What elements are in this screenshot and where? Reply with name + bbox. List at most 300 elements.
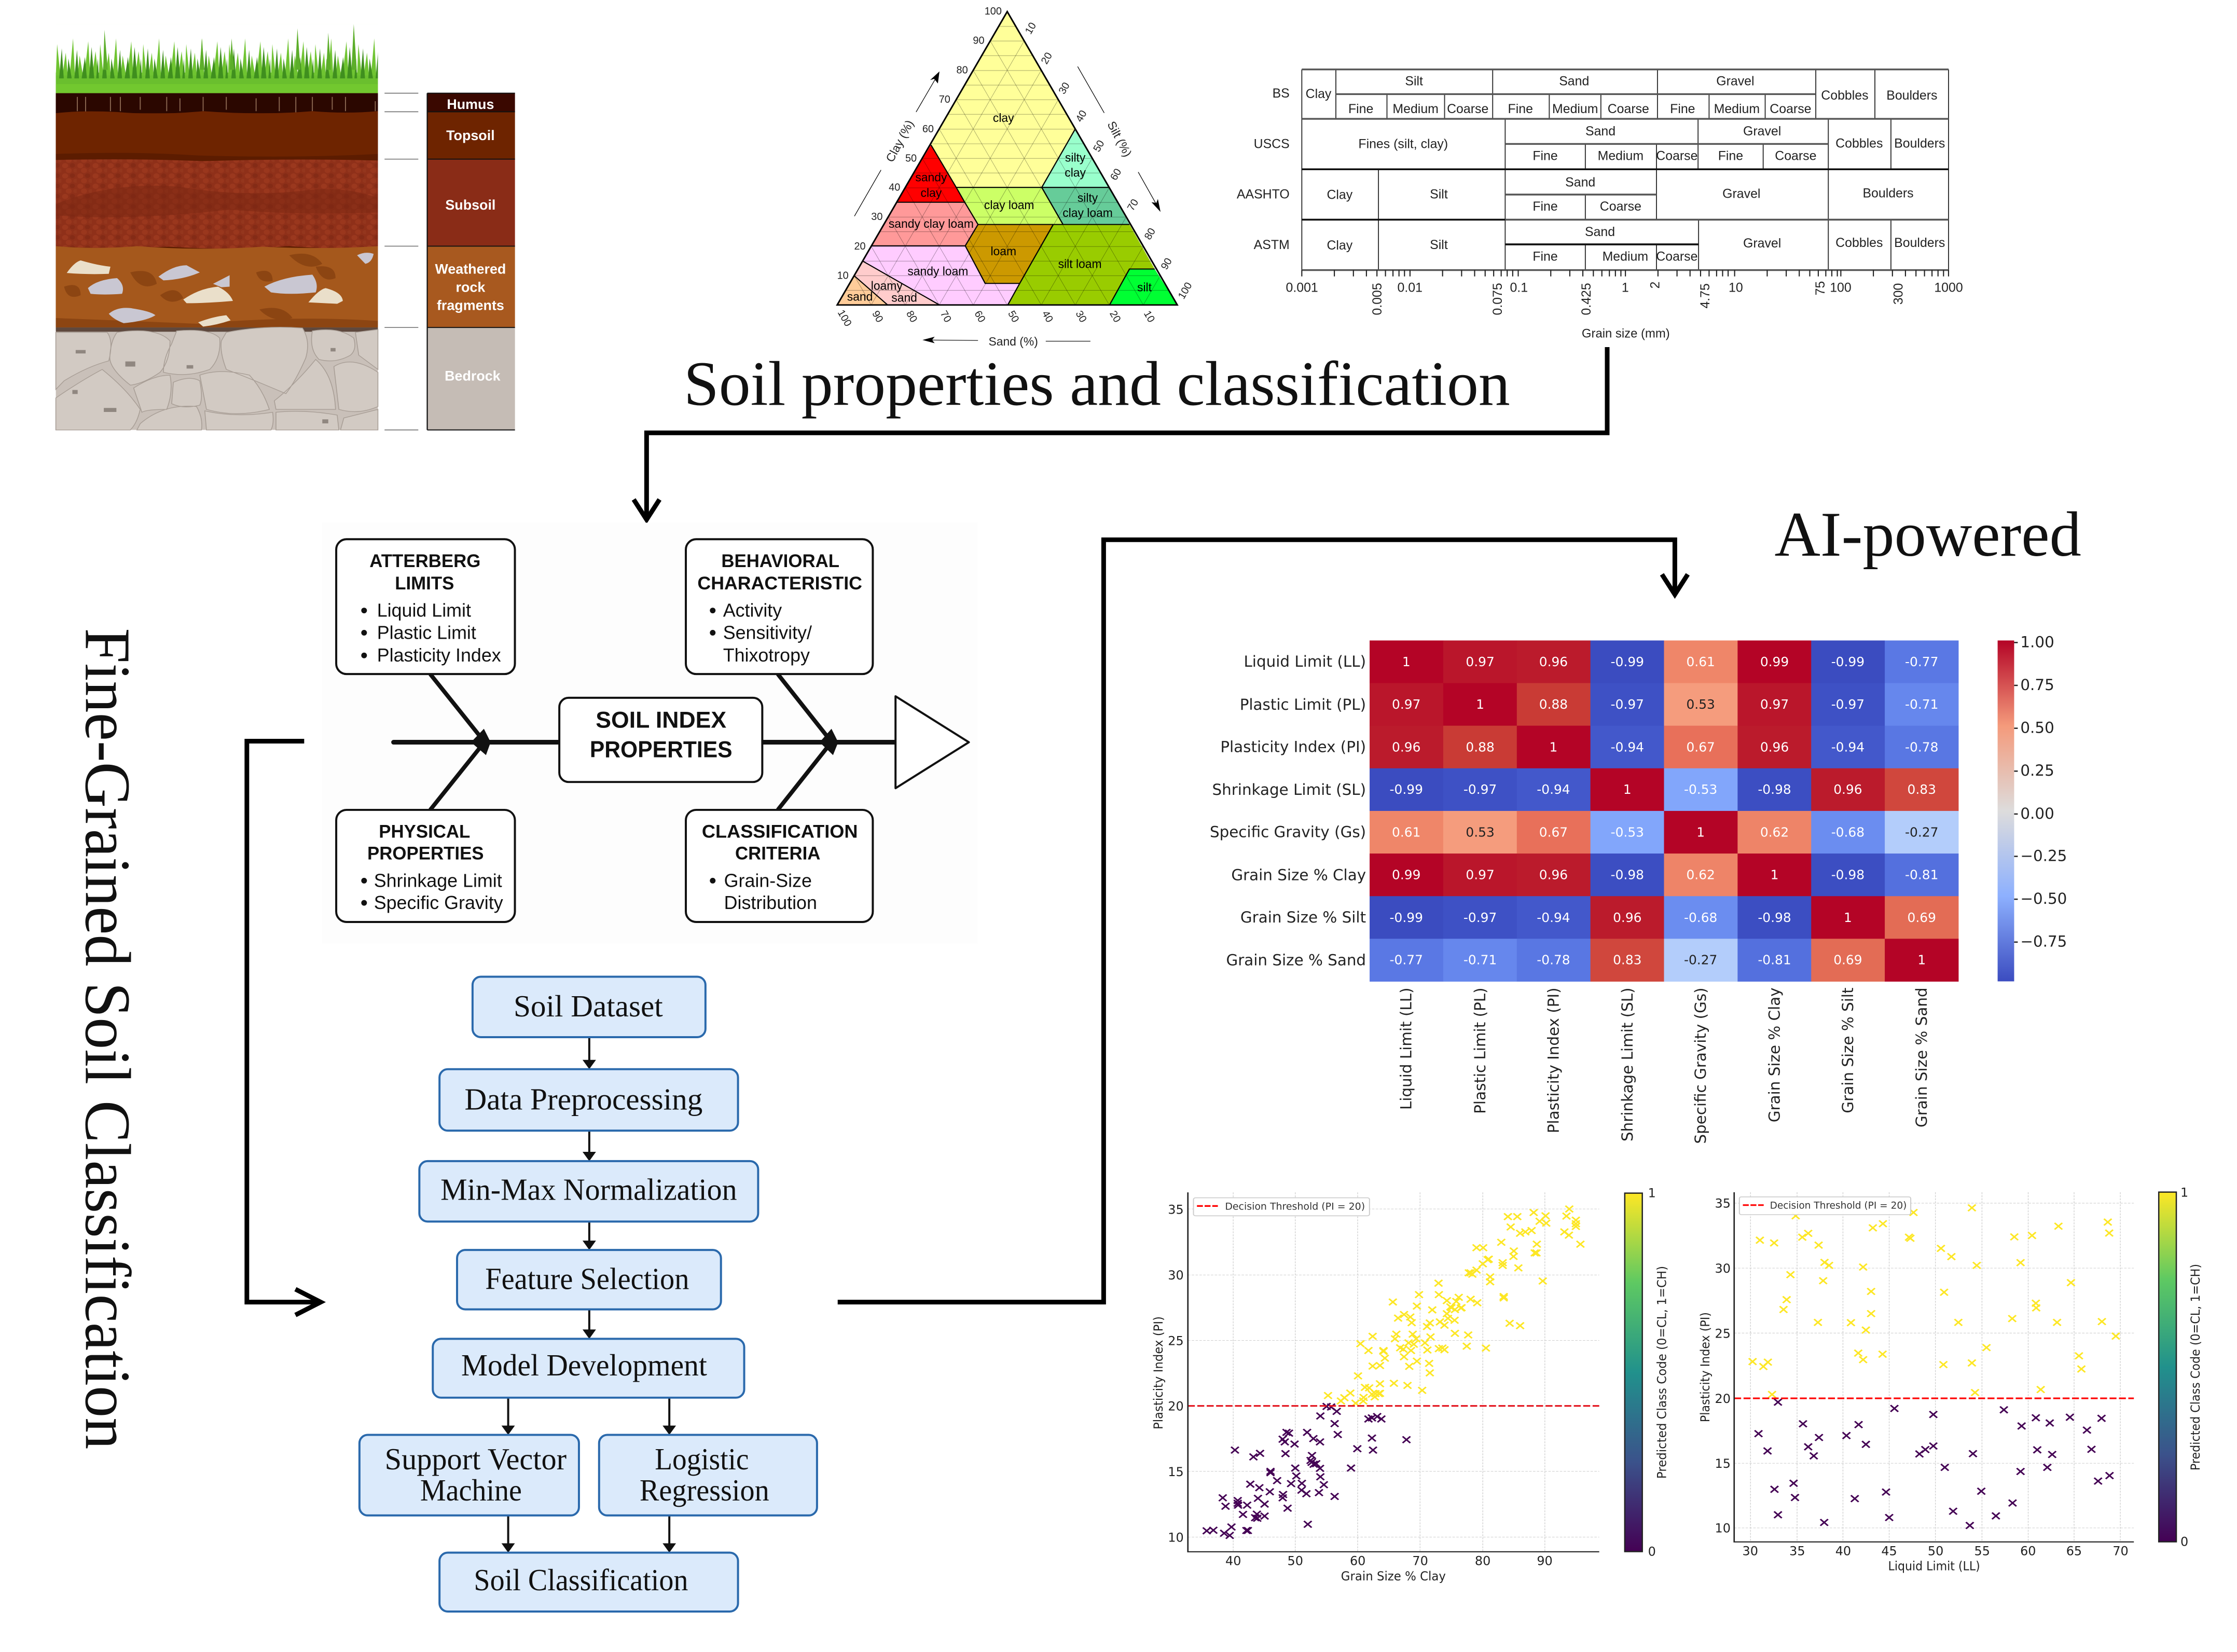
texture class labels: clay loam — [984, 198, 1034, 212]
triangle axis arrows — [854, 66, 1159, 341]
layer legend column — [427, 93, 515, 430]
scatter 1 x ticks — [1225, 1553, 1553, 1568]
texture class labels: sandy loam — [907, 265, 968, 278]
heatmap values: 0.96 — [1613, 910, 1642, 925]
heatmap row labels: Grain Size % Clay — [1231, 866, 1366, 884]
BS row — [1306, 74, 1937, 116]
scatter 2 x label: Liquid Limit (LL) — [1888, 1559, 1980, 1573]
scatter 1 x ticks: 60 — [1350, 1553, 1365, 1568]
heatmap row labels: Plasticity Index (PI) — [1220, 738, 1366, 755]
texture class labels: sand — [847, 290, 873, 303]
arrow: soil properties to index properties — [633, 347, 1607, 519]
heatmap values: -0.27 — [1905, 825, 1938, 840]
scatter 2 colorbar: 0 — [2180, 1535, 2188, 1549]
heatmap values: -0.68 — [1831, 825, 1865, 840]
scatter 2 colorbar label: Predicted Class Code (0=CL, 1=CH) — [2188, 1264, 2203, 1470]
layer boundary ticks — [384, 93, 418, 430]
ASTM row: Gravel — [1743, 236, 1781, 251]
USCS row: Cobbles — [1835, 136, 1883, 151]
step: soil classification — [439, 1552, 738, 1612]
heatmap values: -0.98 — [1611, 867, 1644, 882]
ASTM row: Silt — [1430, 238, 1448, 252]
scatter 2 threshold line — [1734, 1397, 2134, 1400]
head triangle — [895, 696, 969, 788]
heatmap values: -0.77 — [1905, 654, 1938, 669]
heatmap values: -0.53 — [1684, 782, 1717, 797]
heatmap colorbar: 0.25 — [2020, 762, 2054, 779]
heatmap row labels: Specific Gravity (Gs) — [1210, 823, 1366, 841]
step: soil classification: Soil Classification — [474, 1563, 688, 1597]
scatter 2 legend box — [1739, 1197, 1911, 1215]
step: logistic regression: Logistic — [655, 1442, 749, 1476]
AASHTO row: Silt — [1430, 187, 1448, 201]
heatmap values: -0.71 — [1905, 697, 1938, 712]
heatmap values: 0.96 — [1539, 654, 1568, 669]
legend column labels: fragments — [437, 297, 504, 313]
sand axis numbers: 10 — [1141, 309, 1157, 324]
heatmap values: -0.78 — [1537, 953, 1570, 968]
box: behavioral characteristic: CHARACTERISTIC — [697, 573, 862, 594]
texture class labels: sandy — [915, 170, 947, 184]
box: physical properties: PHYSICAL — [379, 822, 470, 842]
heatmap column labels: Plasticity Index (PI) — [1544, 987, 1562, 1133]
grain size axis numbers: 300 — [1891, 283, 1905, 305]
heatmap values: 0.96 — [1392, 739, 1420, 754]
scatter 2 legend text: Decision Threshold (PI = 20) — [1770, 1200, 1907, 1211]
clay axis numbers: 50 — [905, 153, 917, 164]
correlation heatmap — [1210, 633, 2067, 1144]
box: behavioral characteristic — [686, 539, 873, 674]
clay axis numbers: 70 — [939, 94, 950, 105]
scatter 2 x ticks: 60 — [2020, 1544, 2036, 1558]
AASHTO row: Fine — [1532, 199, 1558, 214]
scatter 2 y ticks: 30 — [1715, 1261, 1731, 1276]
heatmap values: 0.61 — [1392, 825, 1420, 840]
grain size axis title: Grain size (mm) — [1582, 327, 1670, 341]
heatmap values: 1 — [1476, 697, 1484, 712]
silt axis numbers: 40 — [1074, 108, 1089, 124]
grass layer — [56, 24, 378, 93]
box: behavioral characteristic: Activity — [723, 600, 782, 621]
heatmap values: -0.94 — [1537, 910, 1570, 925]
heatmap values: 0.67 — [1686, 739, 1715, 754]
heatmap values: 0.96 — [1539, 867, 1568, 882]
workflow flowchart — [360, 976, 817, 1612]
scatter 1 x ticks: 70 — [1412, 1553, 1428, 1568]
subsoil dark band — [56, 186, 378, 217]
scatter 2 colorbar: 1 — [2180, 1186, 2188, 1200]
fishbone diagram — [322, 522, 977, 944]
BS row: Coarse — [1608, 102, 1649, 116]
grain size axis numbers: 75 — [1813, 281, 1828, 295]
legend column labels: rock — [456, 279, 485, 295]
heatmap values: 0.69 — [1908, 910, 1936, 925]
box: physical properties: Shrinkage Limit — [374, 870, 502, 891]
texture class labels: silty — [1065, 151, 1086, 164]
heatmap values: 0.53 — [1686, 697, 1715, 712]
USCS row: Coarse — [1656, 149, 1697, 163]
scatter 1 CH points — [1328, 1209, 1580, 1403]
heatmap values: 0.67 — [1539, 825, 1568, 840]
BS row: Medium — [1392, 102, 1439, 116]
step: data preprocessing: Data Preprocessing — [464, 1082, 702, 1116]
scatter 1 y ticks: 15 — [1168, 1465, 1184, 1479]
heatmap values: -0.99 — [1390, 782, 1423, 797]
scatter 2 x ticks: 55 — [1974, 1544, 1990, 1558]
AASHTO row: Clay — [1327, 187, 1353, 202]
box: classification criteria: CRITERIA — [735, 844, 820, 864]
texture class labels: loam — [990, 244, 1016, 258]
scatter 1 y ticks: 35 — [1168, 1202, 1184, 1217]
heatmap colorbar: 0.00 — [2020, 805, 2054, 822]
ASTM row: Boulders — [1894, 236, 1945, 250]
heatmap column labels: Grain Size % Clay — [1765, 987, 1783, 1122]
heading: soil properties and classification: Soil properties and classification — [684, 349, 1510, 419]
heatmap values: 0.62 — [1760, 825, 1789, 840]
bedrock layer — [56, 327, 378, 430]
subsoil layer — [56, 159, 378, 249]
legend column labels — [435, 97, 506, 384]
AASHTO row: Coarse — [1600, 199, 1641, 214]
legend column labels: Humus — [447, 97, 494, 112]
texture class labels: clay — [993, 111, 1014, 125]
heatmap values: 0.69 — [1833, 953, 1862, 968]
arrow: workflow to AI results — [838, 540, 1688, 1302]
step: model development: Model Development — [461, 1348, 707, 1382]
grain size axis numbers: 4.75 — [1698, 283, 1713, 309]
silt axis numbers: 30 — [1057, 80, 1072, 96]
scatter 1 colorbar — [1625, 1186, 1656, 1559]
texture class labels: clay — [921, 186, 942, 199]
sand axis numbers: 90 — [869, 309, 885, 324]
texture class labels: silt loam — [1058, 257, 1102, 271]
heatmap values: -0.94 — [1611, 739, 1644, 754]
standard names: ASTM — [1254, 238, 1290, 252]
heatmap column labels: Grain Size % Sand — [1913, 987, 1930, 1127]
heatmap values: 1 — [1623, 782, 1632, 797]
silt axis numbers: 90 — [1159, 256, 1175, 272]
vertical heading: fine-grained soil classification: Fine-Grained Soil Classification — [71, 628, 143, 1449]
AASHTO row — [1327, 175, 1914, 214]
heatmap column labels: Shrinkage Limit (SL) — [1619, 987, 1636, 1141]
grain size axis numbers: 0.01 — [1397, 280, 1423, 295]
scatter 1 x ticks: 90 — [1537, 1553, 1553, 1568]
heatmap colorbar: −0.75 — [2020, 933, 2067, 951]
sand axis numbers: 60 — [972, 309, 988, 324]
BS row: Medium — [1714, 102, 1760, 116]
USCS row: Medium — [1598, 149, 1644, 163]
heatmap values: -0.53 — [1611, 825, 1644, 840]
AASHTO row: Gravel — [1722, 186, 1760, 201]
sand axis numbers: 50 — [1005, 309, 1021, 324]
soil base tone — [56, 93, 378, 327]
box: atterberg limits: ATTERBERG — [369, 551, 480, 571]
BS row: Gravel — [1716, 74, 1755, 88]
USCS row: Fine — [1718, 149, 1743, 163]
texture class labels — [847, 111, 1152, 304]
heatmap values: 0.96 — [1833, 782, 1862, 797]
heatmap colorbar: 1.00 — [2020, 633, 2054, 651]
scatter 2 x ticks: 70 — [2112, 1544, 2129, 1558]
box: atterberg limits: Liquid Limit — [377, 600, 471, 621]
box: behavioral characteristic: BEHAVIORAL — [721, 551, 839, 571]
texture regions — [837, 11, 1177, 305]
scatter 2 CL points — [1759, 1402, 2109, 1525]
heatmap column labels — [1398, 987, 1930, 1144]
heatmap colorbar: 0.75 — [2020, 676, 2054, 694]
topsoil layer — [56, 111, 378, 160]
clay axis numbers: 60 — [922, 123, 934, 135]
step: min-max normalization: Min-Max Normalization — [440, 1173, 737, 1207]
box: physical properties: PROPERTIES — [367, 844, 484, 864]
grain size axis numbers: 100 — [1830, 280, 1852, 295]
grain size axis numbers: 0.425 — [1579, 283, 1594, 315]
flow arrows — [502, 1037, 676, 1552]
legend column labels: Topsoil — [446, 128, 495, 143]
grain size axis numbers: 0.005 — [1370, 283, 1385, 315]
scatter 2 x ticks: 45 — [1881, 1544, 1897, 1558]
ASTM row: Clay — [1327, 238, 1353, 253]
heatmap values: -0.94 — [1537, 782, 1570, 797]
heatmap values: -0.71 — [1463, 953, 1497, 968]
legend column labels: Subsoil — [445, 197, 495, 213]
texture class labels: sandy clay loam — [889, 217, 974, 230]
BS row: Clay — [1306, 87, 1332, 101]
grain size axis numbers: 0.1 — [1510, 280, 1528, 295]
silt axis numbers: 50 — [1091, 139, 1107, 154]
heatmap values: 0.88 — [1539, 697, 1568, 712]
grain size axis numbers: 1000 — [1934, 280, 1963, 295]
step: feature selection — [457, 1250, 721, 1310]
scatter 2 y ticks: 25 — [1715, 1326, 1731, 1341]
legend column labels: Bedrock — [445, 368, 501, 384]
scatter 2 x ticks: 30 — [1743, 1544, 1758, 1558]
scatter 1 colorbar label: Predicted Class Code (0=CL, 1=CH) — [1654, 1266, 1669, 1479]
scatter 2 y label: Plasticity Index (PI) — [1698, 1312, 1713, 1422]
clay axis numbers: 20 — [854, 241, 866, 252]
heatmap values: 1 — [1402, 654, 1411, 669]
scatter 2 grid — [1734, 1192, 2134, 1542]
grain size classification table — [1237, 70, 1963, 341]
box: physical properties: Specific Gravity — [374, 892, 503, 913]
box: soil index properties — [559, 698, 762, 782]
BS row: Coarse — [1447, 102, 1488, 116]
clay axis numbers — [837, 6, 1002, 282]
clay axis numbers: 40 — [889, 182, 900, 193]
step: feature selection: Feature Selection — [485, 1262, 689, 1296]
USCS row: Boulders — [1894, 136, 1945, 151]
heatmap values: 0.99 — [1392, 867, 1420, 882]
heatmap values: -0.97 — [1831, 697, 1865, 712]
USCS row: Fine — [1532, 149, 1558, 163]
sand axis numbers: 20 — [1107, 309, 1123, 324]
heatmap colorbar: −0.25 — [2020, 847, 2067, 864]
heatmap values: 1 — [1917, 953, 1926, 968]
scatter 1 y label: Plasticity Index (PI) — [1151, 1316, 1166, 1429]
box: atterberg limits: Plasticity Index — [377, 645, 501, 666]
silt axis numbers: 60 — [1108, 167, 1124, 183]
scatter chart: clay vs plasticity index — [1151, 1186, 1669, 1584]
BS row: Fine — [1670, 102, 1695, 116]
box: classification criteria — [686, 810, 873, 922]
clay axis numbers: 10 — [837, 270, 849, 282]
scatter 1 y ticks: 25 — [1168, 1333, 1184, 1348]
scatter 2 y ticks — [1715, 1196, 1731, 1536]
heatmap values: 1 — [1696, 825, 1705, 840]
step: support vector machine: Machine — [420, 1473, 522, 1507]
soil profile illustration — [56, 24, 515, 430]
ASTM row — [1327, 225, 1945, 264]
step: logistic regression — [599, 1435, 817, 1516]
grain size axis numbers: 10 — [1729, 280, 1743, 295]
USCS row: Fines (silt, clay) — [1358, 137, 1448, 152]
silt axis numbers: 80 — [1142, 226, 1158, 242]
texture class labels: silty — [1078, 191, 1098, 204]
spine and bones — [394, 674, 895, 810]
scatter 2 colorbar — [2159, 1186, 2188, 1549]
scatter 2 y ticks: 15 — [1715, 1456, 1731, 1471]
grain size axis numbers: 0.075 — [1490, 283, 1505, 315]
heatmap values: 0.97 — [1466, 867, 1495, 882]
step: logistic regression: Regression — [640, 1473, 769, 1507]
BS row: Sand — [1559, 74, 1589, 88]
step: soil dataset — [473, 976, 706, 1037]
heatmap values: -0.97 — [1463, 782, 1497, 797]
heatmap values: -0.94 — [1831, 739, 1865, 754]
heatmap values: 0.97 — [1392, 697, 1420, 712]
scatter 2 y ticks: 10 — [1715, 1521, 1731, 1536]
scatter 1 colorbar: 0 — [1648, 1544, 1656, 1559]
step: data preprocessing — [439, 1069, 738, 1131]
step: support vector machine — [360, 1435, 579, 1516]
scatter 1 y ticks: 30 — [1168, 1268, 1184, 1283]
topsoil darker band — [56, 153, 378, 162]
sand axis label: Sand (%) — [988, 335, 1038, 348]
step: model development — [433, 1339, 744, 1398]
humus layer — [56, 93, 378, 113]
clay axis label: Clay (%) — [883, 118, 916, 164]
heatmap column labels: Grain Size % Silt — [1839, 987, 1857, 1113]
silt axis label: Silt (%) — [1104, 119, 1135, 159]
USCS row — [1358, 124, 1945, 163]
BS row: Boulders — [1886, 88, 1937, 103]
box: soil index properties: SOIL INDEX — [596, 707, 726, 733]
step: min-max normalization — [419, 1161, 758, 1221]
heading: AI-powered: AI-powered — [1775, 500, 2081, 570]
ASTM row: Sand — [1585, 225, 1615, 239]
clay axis numbers: 100 — [985, 6, 1002, 17]
USCS row: Gravel — [1743, 124, 1781, 139]
table grid — [1302, 70, 1949, 270]
step: soil dataset: Soil Dataset — [514, 989, 663, 1023]
heatmap values: 1 — [1771, 867, 1778, 882]
scatter 1 x ticks: 50 — [1288, 1553, 1303, 1568]
heatmap values: -0.27 — [1684, 953, 1717, 968]
silt axis numbers — [1023, 21, 1194, 301]
box: physical properties — [336, 810, 515, 922]
USCS row: Coarse — [1775, 149, 1816, 163]
scatter 1 x label: Grain Size % Clay — [1341, 1569, 1446, 1584]
silt axis numbers: 20 — [1039, 50, 1055, 66]
heatmap values: -0.99 — [1390, 910, 1423, 925]
BS row: Fine — [1348, 102, 1373, 116]
heatmap values: -0.99 — [1831, 654, 1865, 669]
clay axis numbers: 30 — [871, 211, 882, 223]
BS row: Coarse — [1770, 102, 1811, 116]
ASTM row: Medium — [1603, 250, 1648, 264]
heatmap values: -0.81 — [1905, 867, 1938, 882]
heatmap row labels: Plastic Limit (PL) — [1240, 696, 1366, 713]
step: support vector machine: Support Vector — [385, 1442, 567, 1476]
scatter 1 x ticks: 80 — [1475, 1553, 1490, 1568]
ASTM row: Cobbles — [1835, 236, 1883, 250]
scatter 2 CH points — [1752, 1208, 2116, 1395]
standard names: AASHTO — [1237, 187, 1290, 201]
heatmap values: -0.68 — [1684, 910, 1717, 925]
heatmap values: -0.98 — [1758, 910, 1791, 925]
heatmap column labels: Specific Gravity (Gs) — [1692, 987, 1709, 1144]
box: atterberg limits: Plastic Limit — [377, 622, 476, 643]
scatter 1 y ticks — [1168, 1202, 1184, 1545]
heatmap values: 0.97 — [1466, 654, 1495, 669]
sand axis numbers: 30 — [1073, 309, 1089, 324]
clay axis numbers: 90 — [973, 35, 985, 47]
BS row: Medium — [1552, 102, 1598, 116]
sand axis numbers: 100 — [835, 308, 853, 328]
grain size axis numbers: 1 — [1622, 280, 1629, 295]
heatmap values: -0.98 — [1831, 867, 1865, 882]
heatmap values: -0.97 — [1463, 910, 1497, 925]
ASTM row: Fine — [1532, 250, 1558, 264]
BS row: Fine — [1508, 102, 1533, 116]
box: atterberg limits: LIMITS — [395, 573, 454, 594]
texture class labels: sand — [891, 291, 917, 304]
texture class labels: silt — [1137, 280, 1152, 294]
box: classification criteria: CLASSIFICATION — [702, 822, 858, 842]
heatmap cells — [1370, 640, 1958, 982]
scatter 2 x ticks: 65 — [2066, 1544, 2082, 1558]
AASHTO row: Boulders — [1862, 186, 1914, 200]
scatter 1 legend text: Decision Threshold (PI = 20) — [1225, 1201, 1365, 1212]
scatter 1 colorbar: 1 — [1648, 1186, 1656, 1201]
heatmap values: -0.78 — [1905, 739, 1938, 754]
BS row: Silt — [1405, 74, 1423, 88]
heatmap row labels: Grain Size % Silt — [1240, 908, 1366, 926]
heatmap values: -0.81 — [1758, 953, 1791, 968]
texture class labels: clay loam — [1062, 206, 1113, 219]
silt axis numbers: 10 — [1023, 21, 1039, 36]
heatmap colorbar: −0.50 — [2020, 890, 2067, 907]
legend column labels: Weathered — [435, 261, 506, 277]
heatmap values: 0.97 — [1760, 697, 1789, 712]
box: classification criteria: Grain-Size — [724, 870, 812, 891]
heatmap values: 0.99 — [1760, 654, 1789, 669]
heatmap colorbar: 0.50 — [2020, 719, 2054, 737]
grain size axis numbers — [1286, 280, 1963, 315]
heatmap row labels: Liquid Limit (LL) — [1244, 653, 1366, 670]
heatmap values: 0.61 — [1686, 654, 1715, 669]
heatmap column labels: Plastic Limit (PL) — [1471, 987, 1489, 1114]
heatmap values: 1 — [1844, 910, 1852, 925]
sand axis numbers — [835, 308, 1157, 328]
box: soil index properties: PROPERTIES — [590, 736, 733, 762]
heatmap values: -0.97 — [1611, 697, 1644, 712]
box: atterberg limits — [336, 539, 515, 674]
heatmap values: -0.99 — [1611, 654, 1644, 669]
scatter 2 y ticks: 35 — [1715, 1196, 1731, 1210]
heatmap values: 0.88 — [1466, 739, 1495, 754]
heatmap values: 0.62 — [1686, 867, 1715, 882]
